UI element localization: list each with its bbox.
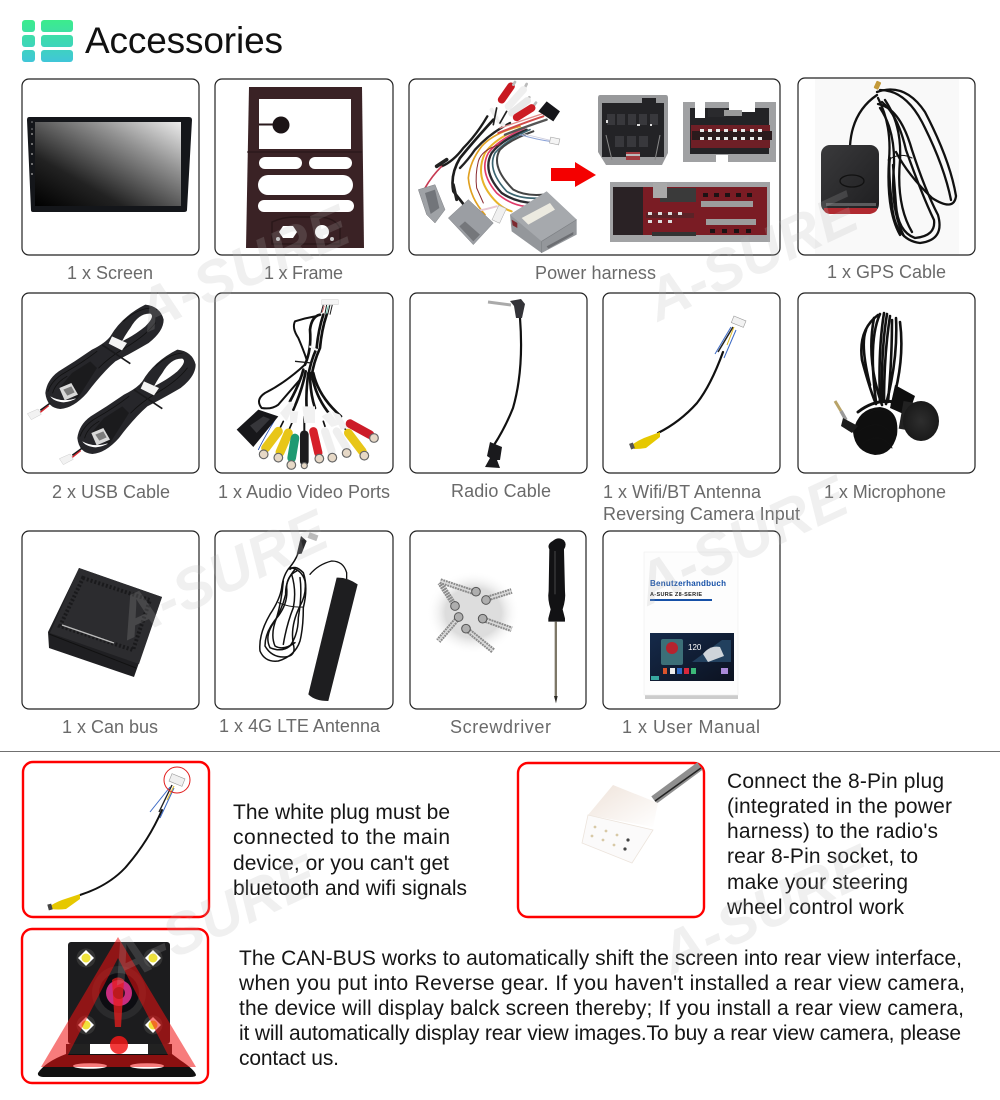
text: 8-pin plug note: rear 8-Pin socket, to [727,845,918,868]
image: 4G LTE antenna [260,532,358,701]
divider [0,751,1000,752]
icon: warning triangle [41,937,196,1067]
watermarks: A-SURE [648,832,884,988]
mid connector [448,200,493,245]
caption: 1 x Screen [67,263,153,283]
connector photo 3 [610,182,770,242]
text: 8-pin plug note: wheel control work [726,896,904,919]
panel: screen [22,79,199,283]
panel: screwdriver [410,531,586,737]
image: microphone [835,313,939,455]
image: user manual: A-SURE Z8-SERIE [650,592,702,598]
image: radio cable [485,299,525,468]
icon: list grid [22,20,73,62]
watermarks: A-SURE [125,192,361,345]
left connector [418,185,445,223]
watermarks [94,179,884,998]
panel: user manual [603,531,780,737]
caption: 2 x USB Cable [52,482,170,502]
text: white plug note [233,801,467,900]
text: white plug note: The white plug must be [233,801,450,824]
caption: Screwdriver [450,717,551,737]
caption line 2: Reversing Camera Input [603,504,800,524]
text: CAN-BUS note: The CAN-BUS works to automatically shift the screen into rear view interface, [239,947,962,970]
panel: frame [215,79,393,283]
image: dash frame [246,87,364,248]
text: 8-pin plug note: harness) to the radio's [727,820,938,843]
caption: 1 x Can bus [62,717,158,737]
caption: Power harness [535,263,656,283]
caption: 1 x User Manual [622,717,760,737]
panel: audio video ports [215,293,393,502]
image: antenna cable with circled plug [47,767,190,910]
image: head unit screen [27,117,192,212]
image: rear view camera [38,942,196,1077]
connector photo 2 [683,100,776,162]
image: user manual: 120 [688,643,702,652]
watermarks: A-SURE [94,842,330,998]
connector photo 1 [598,95,668,165]
text: CAN-BUS note: it will automatically display rear view images.To buy a rear view camera, please [239,1022,961,1045]
RCA plugs [266,424,370,461]
image: RCA cable bundle [237,300,378,469]
caption: 1 x Audio Video Ports [218,482,390,502]
image: can bus box [48,568,162,677]
caption: 1 x Frame [264,263,343,283]
USB cable 1 [27,305,164,420]
image: two USB cables [27,305,196,465]
text: CAN-BUS note [238,947,965,1070]
image: GPS antenna [815,79,959,254]
text: 8-pin plug note: make your steering [727,871,908,894]
text: 8-pin plug note: Connect the 8-Pin plug [727,770,944,793]
text: CAN-BUS note: the device will display balck screen thereby; If you install a rear view camera, [239,997,964,1020]
white plug [549,137,560,145]
image: screwdriver and screws [427,538,566,703]
panel: white plug note [23,762,209,917]
watermarks: A-SURE [634,179,870,335]
text: 8-pin plug note [726,770,952,919]
caption: 1 x 4G LTE Antenna [219,716,381,736]
caption: 1 x Wifi/BT Antenna [603,482,762,502]
text: white plug note: device, or you can't get [233,852,449,875]
black plug [538,101,560,121]
image: wifi/BT antenna cable [629,316,746,450]
text: CAN-BUS note: contact us. [239,1047,339,1070]
screws [427,571,520,654]
text: 8-pin plug note: (integrated in the power [727,795,952,818]
panel: USB cable [22,293,199,502]
panel: GPS cable [798,78,975,282]
panel: power harness [409,79,780,283]
harness wires [418,82,577,253]
USB cable 2 [59,350,196,465]
title: Accessories [85,20,283,61]
image: user manual: Benutzerhandbuch [650,579,726,588]
panel: can bus [22,531,199,737]
watermarks: A-SURE [624,463,860,619]
panel: rear camera warning [22,929,208,1083]
text: white plug note: connected to the main [233,826,450,849]
image: 8-pin plug [582,766,701,863]
caption: Radio Cable [451,481,551,501]
text: CAN-BUS note: when you put into Reverse gear. If you haven't installed a rear view camera, [238,972,965,995]
caption: 1 x Microphone [824,482,946,502]
watermarks: A-SURE [104,497,340,653]
caption: 1 x GPS Cable [827,262,946,282]
image: user manual [644,552,738,699]
arrow [551,162,596,187]
RCA plugs [492,82,536,125]
panel: microphone [798,293,975,502]
panel: radio cable [410,293,587,501]
panel: wifi antenna [603,293,800,524]
heading: Accessories [22,20,283,62]
panel: 8-pin plug note [518,763,704,917]
panel: 4G LTE antenna [215,531,393,736]
image: wiring harness [418,82,776,253]
text: white plug note: bluetooth and wifi signals [233,877,467,900]
big connector [510,191,577,253]
